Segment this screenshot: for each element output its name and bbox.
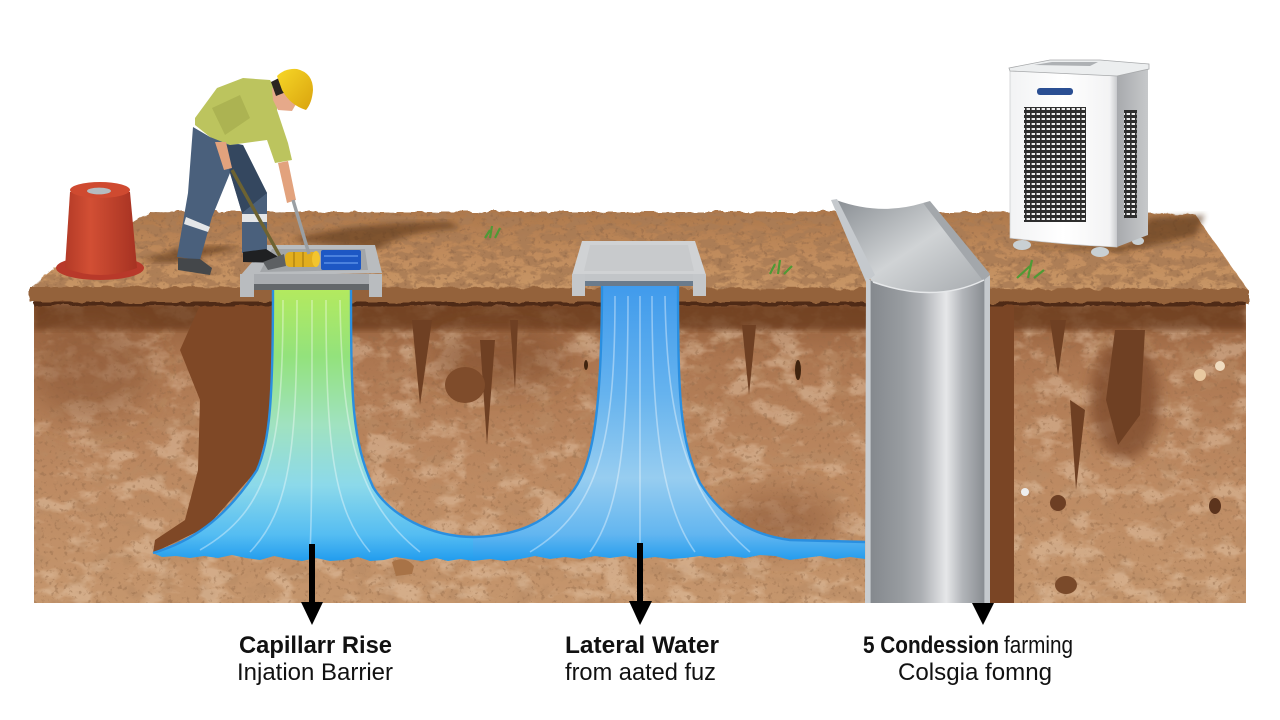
hard hat [277,69,313,110]
unit feet [1013,237,1144,257]
label 3 [863,632,1073,686]
label 3: 5 Condession [863,632,999,659]
label 3: farming [1004,632,1073,659]
worker legs [177,127,267,260]
grass tufts [485,226,1044,278]
worker [177,69,313,275]
label 2: from aated fuz [565,659,716,686]
worker arms [215,142,296,203]
label 2: Lateral Water [565,632,719,659]
ground surface [30,205,1250,306]
ground lip [30,287,1248,304]
blue injection box [321,250,361,270]
front grille [1024,107,1086,222]
probe rod [293,200,309,254]
arrow 3 [972,603,994,625]
cast shadows on ground [140,215,1205,262]
arrow 2 [629,543,652,625]
label 1: Capillarr Rise [239,632,392,659]
shovel [232,170,286,270]
injection slab [240,245,382,297]
soil cross-section block [30,296,1246,603]
label 1: Injation Barrier [237,659,393,686]
unit logo [1037,88,1073,95]
worker shirt [195,78,292,163]
metal barrier pipe [831,199,990,603]
second slab [572,241,706,296]
label 2 [565,632,719,686]
label 1 [237,632,393,686]
root drips [412,320,1145,490]
dehumidifier unit [1009,60,1149,257]
red cone [56,182,144,280]
arrow 1 [301,544,323,625]
worker head [272,88,296,111]
yellow injector [285,251,320,267]
water flow: capillary rise and lateral water [153,282,865,561]
rock below the water [392,559,414,576]
side grille [1124,110,1137,218]
dark cavity behind water [153,305,272,553]
dark strip beside pipe [990,300,1014,603]
label 3: Colsgia fomng [898,659,1052,686]
